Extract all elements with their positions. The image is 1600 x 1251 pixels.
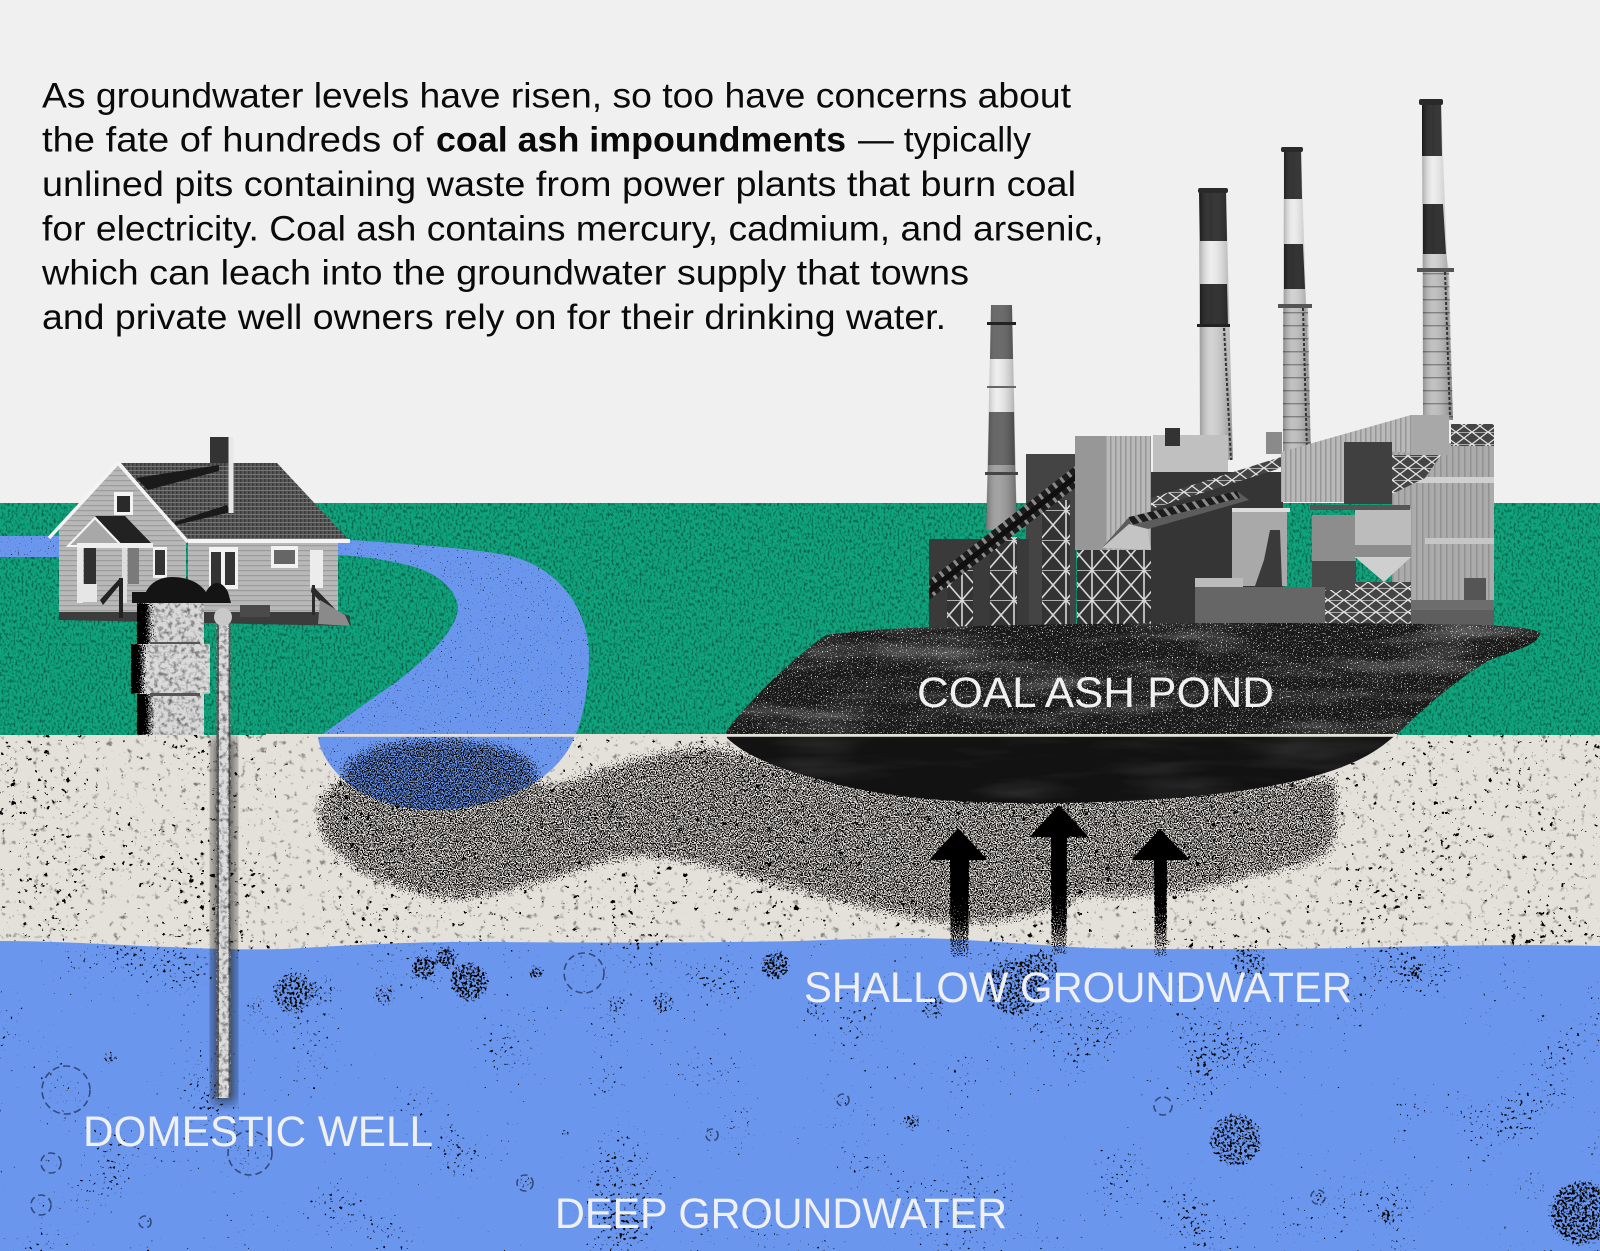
left conveyor and trusses bbox=[929, 466, 1075, 630]
eave trim bbox=[188, 539, 350, 543]
water stains bbox=[31, 943, 1600, 1247]
intro paragraph bbox=[41, 76, 1104, 337]
panel: beige soil layer bbox=[0, 735, 1600, 960]
smokestack 1 bbox=[985, 305, 1018, 530]
silos bbox=[1232, 505, 1411, 628]
low plant buildings bbox=[1195, 578, 1494, 630]
front gable wall bbox=[59, 464, 186, 617]
intro paragraph: unlined pits containing waste from power plants that burn coal bbox=[42, 164, 1076, 204]
collar bbox=[131, 642, 210, 696]
rear buildings bbox=[929, 428, 1283, 630]
intro paragraph: and private well owners rely on for their drinking water. bbox=[42, 297, 946, 337]
chimney bbox=[210, 437, 229, 467]
coal ash pond bbox=[726, 623, 1540, 803]
narrow pipe bbox=[214, 608, 232, 1098]
intro paragraph: for electricity. Coal ash contains mercury, cadmium, and arsenic, bbox=[42, 208, 1104, 248]
contamination plume bbox=[309, 730, 1346, 933]
pond below ground bbox=[726, 736, 1394, 804]
label: deep groundwater: DEEP GROUNDWATER bbox=[555, 1190, 1007, 1238]
label: domestic well: DOMESTIC WELL bbox=[83, 1108, 433, 1156]
windows bbox=[153, 546, 323, 589]
far right building bbox=[1392, 424, 1494, 633]
intro paragraph: — typically bbox=[858, 120, 1031, 160]
factory: power plant bbox=[929, 99, 1494, 633]
domestic well bbox=[131, 577, 236, 1103]
side wall bbox=[188, 543, 338, 613]
pond above ground bbox=[726, 623, 1540, 734]
well halo bbox=[212, 737, 236, 1103]
smokestack 4 bbox=[1417, 99, 1454, 420]
sloped gallery building bbox=[1281, 415, 1449, 504]
central tower bbox=[1075, 436, 1151, 630]
gable window bbox=[114, 492, 133, 515]
smokestack 3 bbox=[1278, 147, 1312, 455]
vent pipe bbox=[228, 437, 234, 513]
foundation bbox=[59, 612, 350, 626]
right conveyors bbox=[1102, 457, 1281, 550]
panel: green surface land bbox=[0, 503, 1600, 735]
ground line bbox=[266, 734, 1397, 737]
intro paragraph: which can leach into the groundwater supply that towns bbox=[41, 253, 969, 293]
house bbox=[49, 437, 350, 626]
porch bbox=[68, 516, 153, 618]
arrow 1 bbox=[929, 828, 988, 958]
steps bbox=[240, 585, 350, 626]
intro paragraph: As groundwater levels have risen, so too have concerns about bbox=[42, 76, 1071, 116]
main casing bbox=[137, 603, 204, 735]
roof bbox=[121, 463, 348, 541]
water stream on the surface bbox=[0, 536, 589, 810]
panel: blue groundwater layer bbox=[0, 938, 1600, 1251]
smokestack 2 bbox=[1197, 188, 1233, 460]
gable trim bbox=[49, 463, 188, 542]
intro paragraph: the fate of hundreds of bbox=[42, 120, 424, 160]
stain rings bbox=[31, 953, 1325, 1228]
cap bbox=[132, 577, 231, 603]
label: coal ash pond: COAL ASH POND bbox=[917, 669, 1274, 717]
arrow 2 bbox=[1029, 805, 1089, 955]
intro paragraph: coal ash impoundments bbox=[436, 120, 846, 160]
arrow 3 bbox=[1131, 829, 1190, 957]
label: shallow groundwater: SHALLOW GROUNDWATER bbox=[804, 964, 1352, 1012]
